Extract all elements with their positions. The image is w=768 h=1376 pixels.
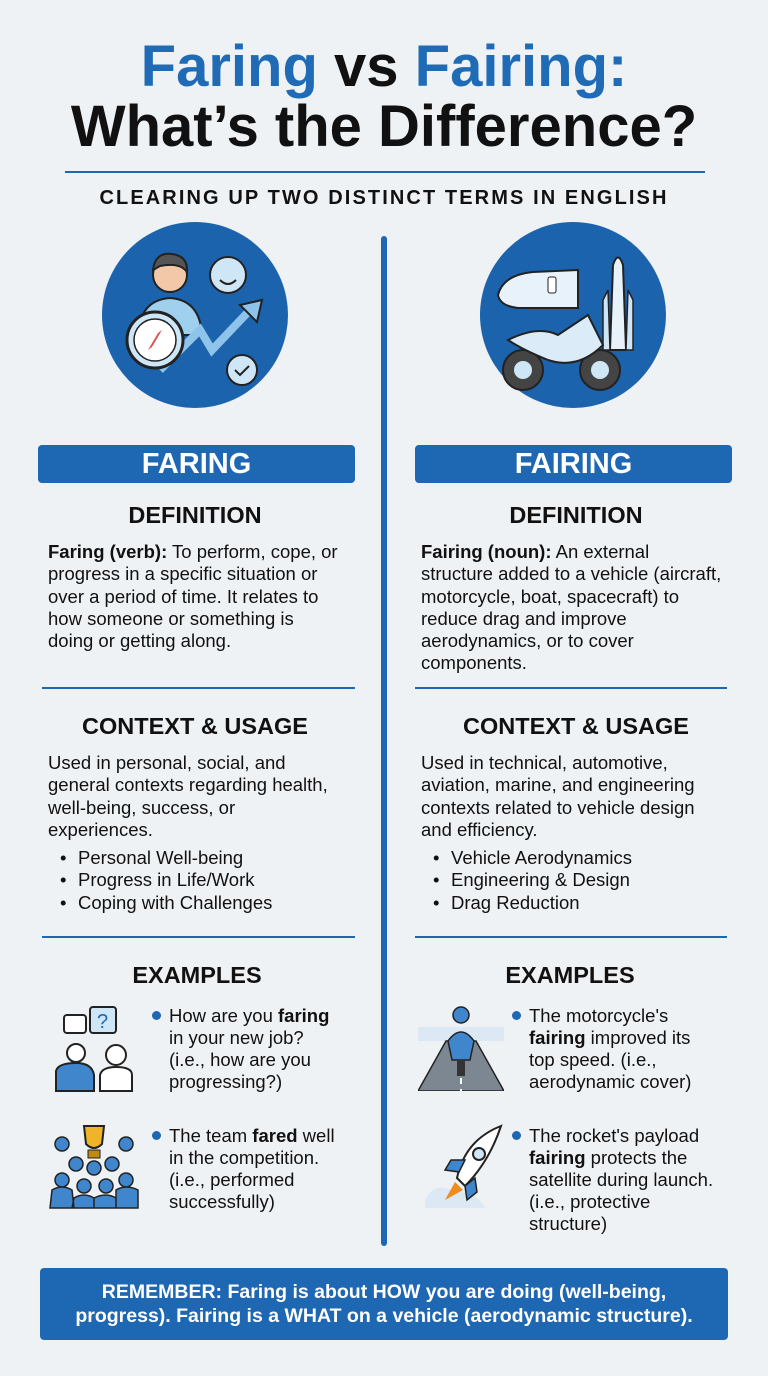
panel: fairing context bbox=[421, 713, 695, 913]
panel: fairing definition: Fairing (noun): An external bbox=[421, 541, 649, 562]
panel: faring context: Progress in Life/Work bbox=[78, 869, 254, 890]
panel: faring context bbox=[48, 713, 328, 913]
panel: faring definition: doing or getting along. bbox=[48, 630, 231, 651]
panel: fairing context: CONTEXT & USAGE bbox=[463, 713, 689, 739]
panel: fairing context: Drag Reduction bbox=[451, 892, 580, 913]
panel: faring definition: over a period of time. It relates to bbox=[48, 586, 318, 607]
panel: faring definition: how someone or something is bbox=[48, 608, 294, 629]
example: fairing 2 bbox=[512, 1125, 737, 1235]
example: faring 2: (i.e., performed bbox=[169, 1169, 294, 1190]
heading: examples right: EXAMPLES bbox=[505, 962, 635, 988]
panel: faring definition bbox=[48, 502, 338, 651]
example: fairing 1 bbox=[512, 1005, 727, 1093]
icon: rocket bbox=[425, 1124, 503, 1208]
example: fairing 2: fairing protects the bbox=[529, 1147, 687, 1168]
callout: remember bbox=[40, 1268, 728, 1340]
band: FAIRING bbox=[415, 445, 732, 483]
example: fairing 1: top speed. (i.e., bbox=[529, 1049, 657, 1070]
example: fairing 1: The motorcycle's bbox=[529, 1005, 668, 1026]
panel: fairing definition: motorcycle, boat, spacecraft) to bbox=[421, 586, 679, 607]
band: FARING bbox=[38, 445, 355, 483]
icon: conversation: ? bbox=[97, 1011, 108, 1033]
panel: fairing definition: structure added to a vehicle (aircraft, bbox=[421, 563, 721, 584]
panel: fairing definition: components. bbox=[421, 652, 527, 673]
title bbox=[70, 34, 697, 159]
example: faring 1: How are you faring bbox=[169, 1005, 329, 1026]
example: faring 1: in your new job? bbox=[169, 1027, 304, 1048]
example: faring 2: successfully) bbox=[169, 1191, 275, 1212]
panel: fairing context: contexts related to vehicle design bbox=[421, 797, 695, 818]
example: fairing 2: satellite during launch. bbox=[529, 1169, 713, 1190]
panel: faring context: well-being, success, or bbox=[48, 797, 235, 818]
example: faring 2 bbox=[152, 1125, 352, 1213]
divider bbox=[381, 236, 387, 1246]
panel: faring context: Personal Well-being bbox=[78, 847, 243, 868]
subtitle: CLEARING UP TWO DISTINCT TERMS IN ENGLISH bbox=[99, 187, 669, 209]
panel: faring context: Coping with Challenges bbox=[78, 892, 272, 913]
example: faring 2: in the competition. bbox=[169, 1147, 319, 1168]
panel: fairing definition: reduce drag and improve bbox=[421, 608, 627, 629]
panel: faring definition: Faring (verb): To perform, cope, or bbox=[48, 541, 338, 562]
title: What’s the Difference? bbox=[71, 94, 697, 159]
panel: fairing definition bbox=[421, 502, 721, 673]
band: FAIRING: FAIRING bbox=[515, 448, 632, 480]
title: Faring vs Fairing: bbox=[141, 34, 627, 99]
icon: fairing vehicles bbox=[480, 222, 666, 408]
panel: fairing context: aviation, marine, and engineering bbox=[421, 774, 695, 795]
panel: fairing context: and efficiency. bbox=[421, 819, 538, 840]
example: faring 1 bbox=[152, 1005, 352, 1093]
panel: fairing definition: aerodynamics, or to cover bbox=[421, 630, 634, 651]
panel: faring definition: DEFINITION bbox=[128, 502, 262, 528]
panel: faring context: general contexts regarding health, bbox=[48, 774, 328, 795]
panel: fairing context: Used in technical, automotive, bbox=[421, 752, 668, 773]
icon: team trophy bbox=[49, 1125, 139, 1209]
example: fairing 1: fairing improved its bbox=[529, 1027, 690, 1048]
icon: conversation bbox=[55, 1006, 133, 1092]
band: FARING: FARING bbox=[142, 448, 251, 480]
example: fairing 1: aerodynamic cover) bbox=[529, 1071, 691, 1092]
example: faring 2: The team fared well bbox=[169, 1125, 335, 1146]
panel: faring context: experiences. bbox=[48, 819, 153, 840]
example: faring 1: (i.e., how are you bbox=[169, 1049, 311, 1070]
panel: faring definition: progress in a specific situation or bbox=[48, 563, 317, 584]
panel: fairing context: Vehicle Aerodynamics bbox=[451, 847, 632, 868]
example: faring 1: progressing?) bbox=[169, 1071, 282, 1092]
heading: examples left: EXAMPLES bbox=[132, 962, 262, 988]
panel: fairing context: Engineering & Design bbox=[451, 869, 630, 890]
callout: remember: progress). Fairing is a WHAT on a vehicle (aerodynamic structure). bbox=[75, 1305, 693, 1327]
callout: remember: REMEMBER: Faring is about HOW you are doing (well-being, bbox=[102, 1281, 666, 1303]
panel: faring context: Used in personal, social, and bbox=[48, 752, 286, 773]
example: fairing 2: structure) bbox=[529, 1213, 607, 1234]
panel: fairing definition: DEFINITION bbox=[509, 502, 643, 528]
example: fairing 2: (i.e., protective bbox=[529, 1191, 650, 1212]
panel: faring context: CONTEXT & USAGE bbox=[82, 713, 308, 739]
example: fairing 2: The rocket's payload bbox=[529, 1125, 699, 1146]
icon: motorcycle on road bbox=[418, 1006, 504, 1091]
icon: faring person progress bbox=[102, 222, 288, 408]
